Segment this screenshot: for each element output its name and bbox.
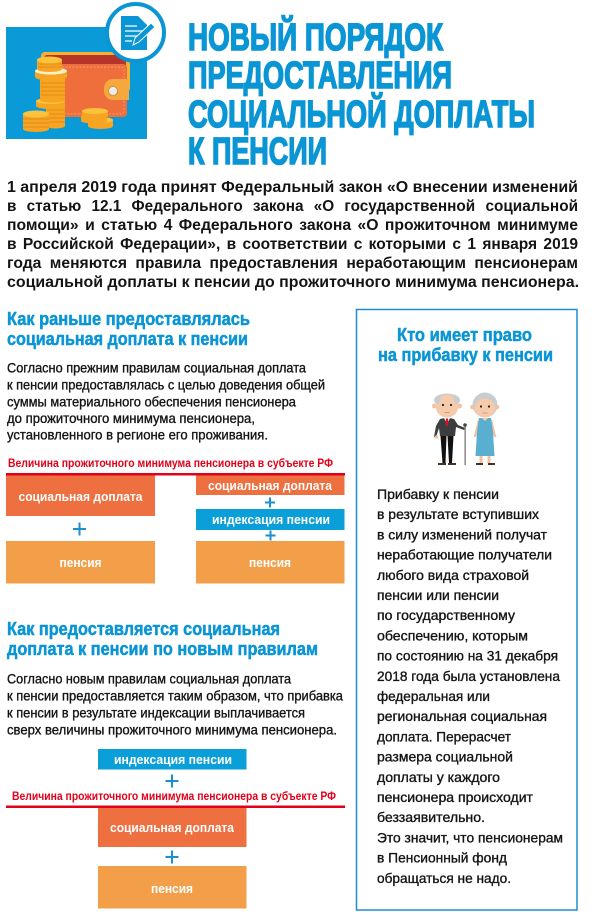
- text block: who is eligible: доплаты у каждого: [377, 770, 500, 785]
- text block: who is eligible: доплата. Перерасчет: [377, 729, 511, 744]
- heading: before: [7, 309, 250, 349]
- right stack diagram: [196, 476, 344, 584]
- text block: who is eligible: любого вида страховой: [377, 568, 529, 583]
- text block: who is eligible: по государственному: [377, 608, 515, 623]
- text block: before: [7, 360, 325, 442]
- heading: who is eligible: Кто имеет право: [397, 325, 532, 345]
- text block: new rules: [7, 672, 343, 738]
- red label: subsistence minimum: Величина прожиточного минимума пенсионера в субъекте РФ: [8, 456, 333, 470]
- heading: before: социальная доплата к пенсии: [7, 329, 248, 349]
- text block: who is eligible: 2018 года была установлена: [377, 669, 560, 684]
- text block: new rules: к пенсии предоставляется таким образом, что прибавка: [7, 688, 343, 704]
- text block: who is eligible: неработающие получатели: [377, 548, 552, 563]
- title: ПРЕДОСТАВЛЕНИЯ: [188, 55, 452, 97]
- intro text block: [7, 179, 579, 291]
- text block: who is eligible: по состоянию на 31 декабря: [377, 649, 558, 664]
- icon: right coin stack: [81, 108, 113, 129]
- stack diagram: new rules: индексация пенсии: [114, 753, 232, 767]
- heading: before: Как раньше предоставлялась: [7, 309, 250, 329]
- icon: document and pen badge: [107, 4, 164, 61]
- text block: new rules: к пенсии в результате индексации выплачивается: [7, 706, 305, 720]
- icon: left coin stack: [23, 110, 49, 132]
- icon: wallet: [41, 52, 130, 117]
- left stack diagram: пенсия: [60, 556, 102, 570]
- intro text block: года меняются правила предоставления неработающим пенсионерам: [7, 255, 578, 272]
- right stack diagram: пенсия: [249, 556, 291, 570]
- heading: who is eligible: [378, 325, 553, 365]
- left stack diagram: [6, 476, 155, 584]
- text block: before: Согласно прежним правилам социальная доплата: [7, 360, 306, 376]
- right stack diagram: индексация пенсии: [212, 513, 330, 527]
- intro text block: помощи» и статью 4 Федерального закона «О прожиточном минимуме: [7, 217, 578, 234]
- text block: before: установленного в регионе его проживания.: [7, 428, 268, 442]
- stack diagram: new rules: [6, 749, 345, 908]
- heading: new rules: Как предоставляется социальная: [7, 619, 280, 639]
- icon: elderly woman: [470, 392, 499, 465]
- title: К ПЕНСИИ: [188, 131, 327, 173]
- text block: who is eligible: [377, 487, 563, 886]
- heading: who is eligible: на прибавку к пенсии: [378, 345, 553, 365]
- icon: main coin stack: [35, 56, 67, 128]
- text block: who is eligible: в Пенсионный фонд: [377, 851, 507, 866]
- icon: elderly man: [432, 394, 467, 465]
- text block: who is eligible: размера социальной: [377, 750, 513, 765]
- intro text block: в статью 12.1 Федерального закона «О государственной социальной: [7, 198, 578, 215]
- icon: wallet and coins on blue square: [6, 4, 164, 139]
- text block: before: к пенсии предоставлялась с целью доведения общей: [7, 378, 325, 392]
- stack diagram: new rules: пенсия: [151, 882, 193, 896]
- text block: who is eligible: в результате вступивших: [377, 507, 539, 522]
- red label: subsistence minimum: Величина прожиточного минимума пенсионера в субъекте РФ: [12, 789, 336, 803]
- text block: before: суммы материального обеспечения пенсионера: [7, 394, 296, 410]
- text block: who is eligible: обеспечению, которым: [377, 628, 528, 643]
- text block: who is eligible: беззаявительно.: [377, 810, 485, 825]
- heading: new rules: [7, 619, 318, 659]
- left stack diagram: социальная доплата: [18, 490, 144, 504]
- text block: who is eligible: региональная социальная: [377, 709, 547, 724]
- text block: who is eligible: Это значит, что пенсионерам: [377, 830, 563, 845]
- red line: [6, 806, 345, 808]
- intro text block: 1 апреля 2019 года принят Федеральный закон «О внесении изменений: [7, 179, 578, 196]
- stack diagram: new rules: социальная доплата: [110, 821, 235, 835]
- title: [188, 14, 535, 173]
- panel: how it works under new rules: [6, 619, 345, 908]
- text block: new rules: сверх величины прожиточного минимума пенсионера.: [7, 722, 337, 738]
- text block: new rules: Согласно новым правилам социальная доплата: [7, 672, 291, 686]
- text block: who is eligible: федеральная или: [377, 689, 490, 704]
- panel: who is eligible: [356, 310, 577, 910]
- red line: [6, 473, 345, 476]
- text block: who is eligible: обращаться не надо.: [377, 871, 511, 886]
- title: НОВЫЙ ПОРЯДОК: [188, 14, 444, 59]
- intro text block: социальной доплаты к пенсии до прожиточного минимума пенсионера.: [7, 274, 579, 291]
- text block: who is eligible: Прибавку к пенсии: [377, 487, 499, 502]
- intro text block: в Российской Федерации», в соответствии с которыми с 1 января 2019: [7, 236, 578, 253]
- text block: who is eligible: пенсии или пенсии: [377, 588, 499, 603]
- right stack diagram: социальная доплата: [208, 479, 333, 493]
- text block: who is eligible: пенсионера происходит: [377, 790, 533, 805]
- icon: elderly couple: [432, 392, 499, 465]
- panel: how it was before: [6, 309, 345, 584]
- text block: before: до прожиточного минимума пенсионера,: [7, 411, 255, 426]
- heading: new rules: доплата к пенсии по новым правилам: [7, 639, 318, 659]
- text block: who is eligible: в силу изменений получат: [377, 527, 547, 542]
